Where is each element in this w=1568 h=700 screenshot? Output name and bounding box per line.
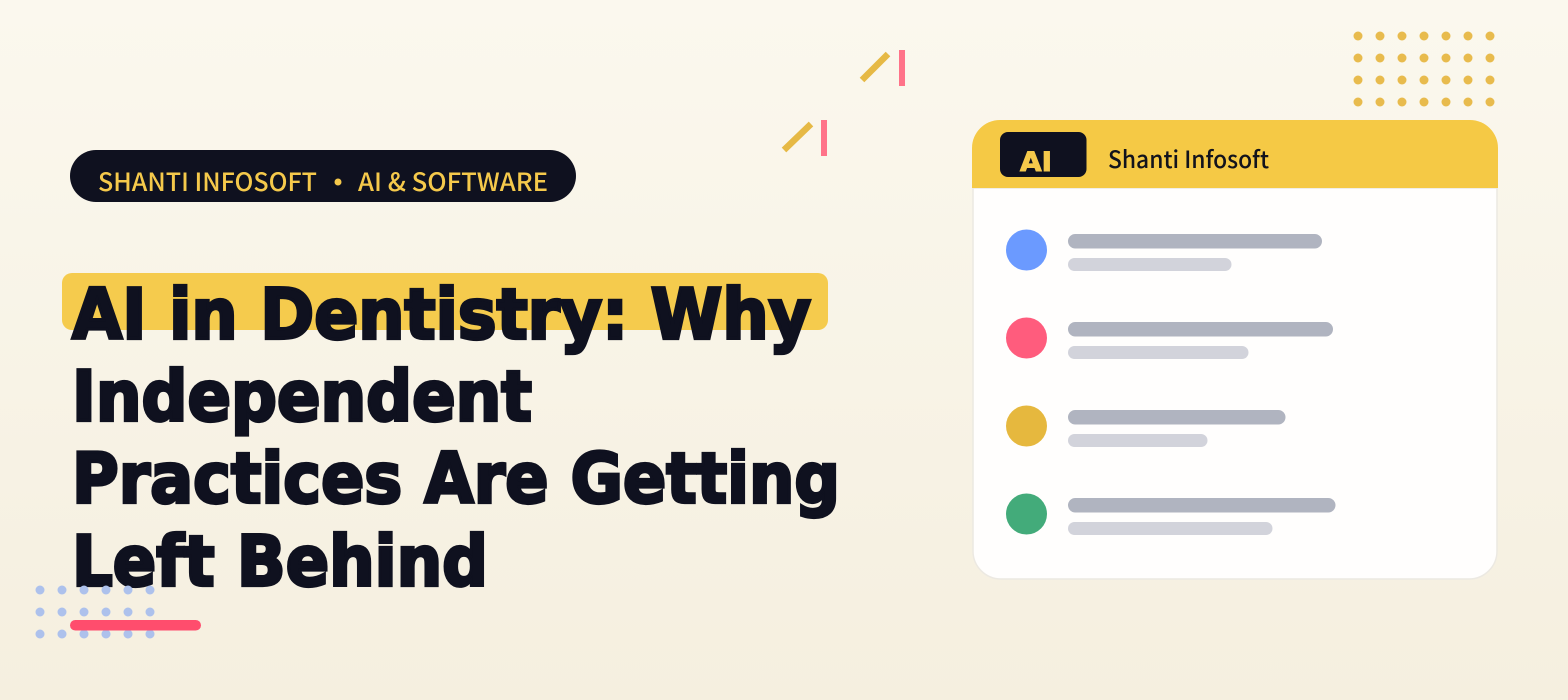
panel: app card	[972, 120, 1498, 579]
badge: Shanti Infosoft AI and software	[70, 150, 576, 202]
list row 3	[1006, 406, 1286, 447]
accent underline bar	[70, 620, 201, 630]
title text: Practices Are Getting	[72, 438, 840, 520]
logo badge	[1000, 132, 1086, 178]
badge: Shanti Infosoft AI and software: AI & SOFTWARE	[358, 163, 548, 199]
dot pattern: bottom left	[36, 586, 154, 638]
title text: Left Behind	[72, 522, 488, 602]
list row 4	[1006, 494, 1336, 535]
title text: AI in Dentistry: Why	[72, 274, 811, 356]
title text: Independent	[72, 356, 532, 438]
title with highlight	[62, 273, 840, 602]
card body	[973, 188, 1497, 579]
badge: Shanti Infosoft AI and software: SHANTI INFOSOFT	[98, 163, 317, 199]
accent marks: upper	[862, 50, 905, 86]
brand name: Shanti Infosoft	[1108, 141, 1269, 175]
title highlight	[62, 273, 828, 330]
list row 1	[1006, 230, 1322, 271]
accent marks: lower	[784, 120, 827, 156]
title text	[72, 274, 840, 602]
dot pattern: top right	[1354, 32, 1494, 106]
logo badge: AI	[1020, 147, 1052, 178]
list row 2	[1006, 318, 1333, 359]
card header	[972, 120, 1498, 188]
